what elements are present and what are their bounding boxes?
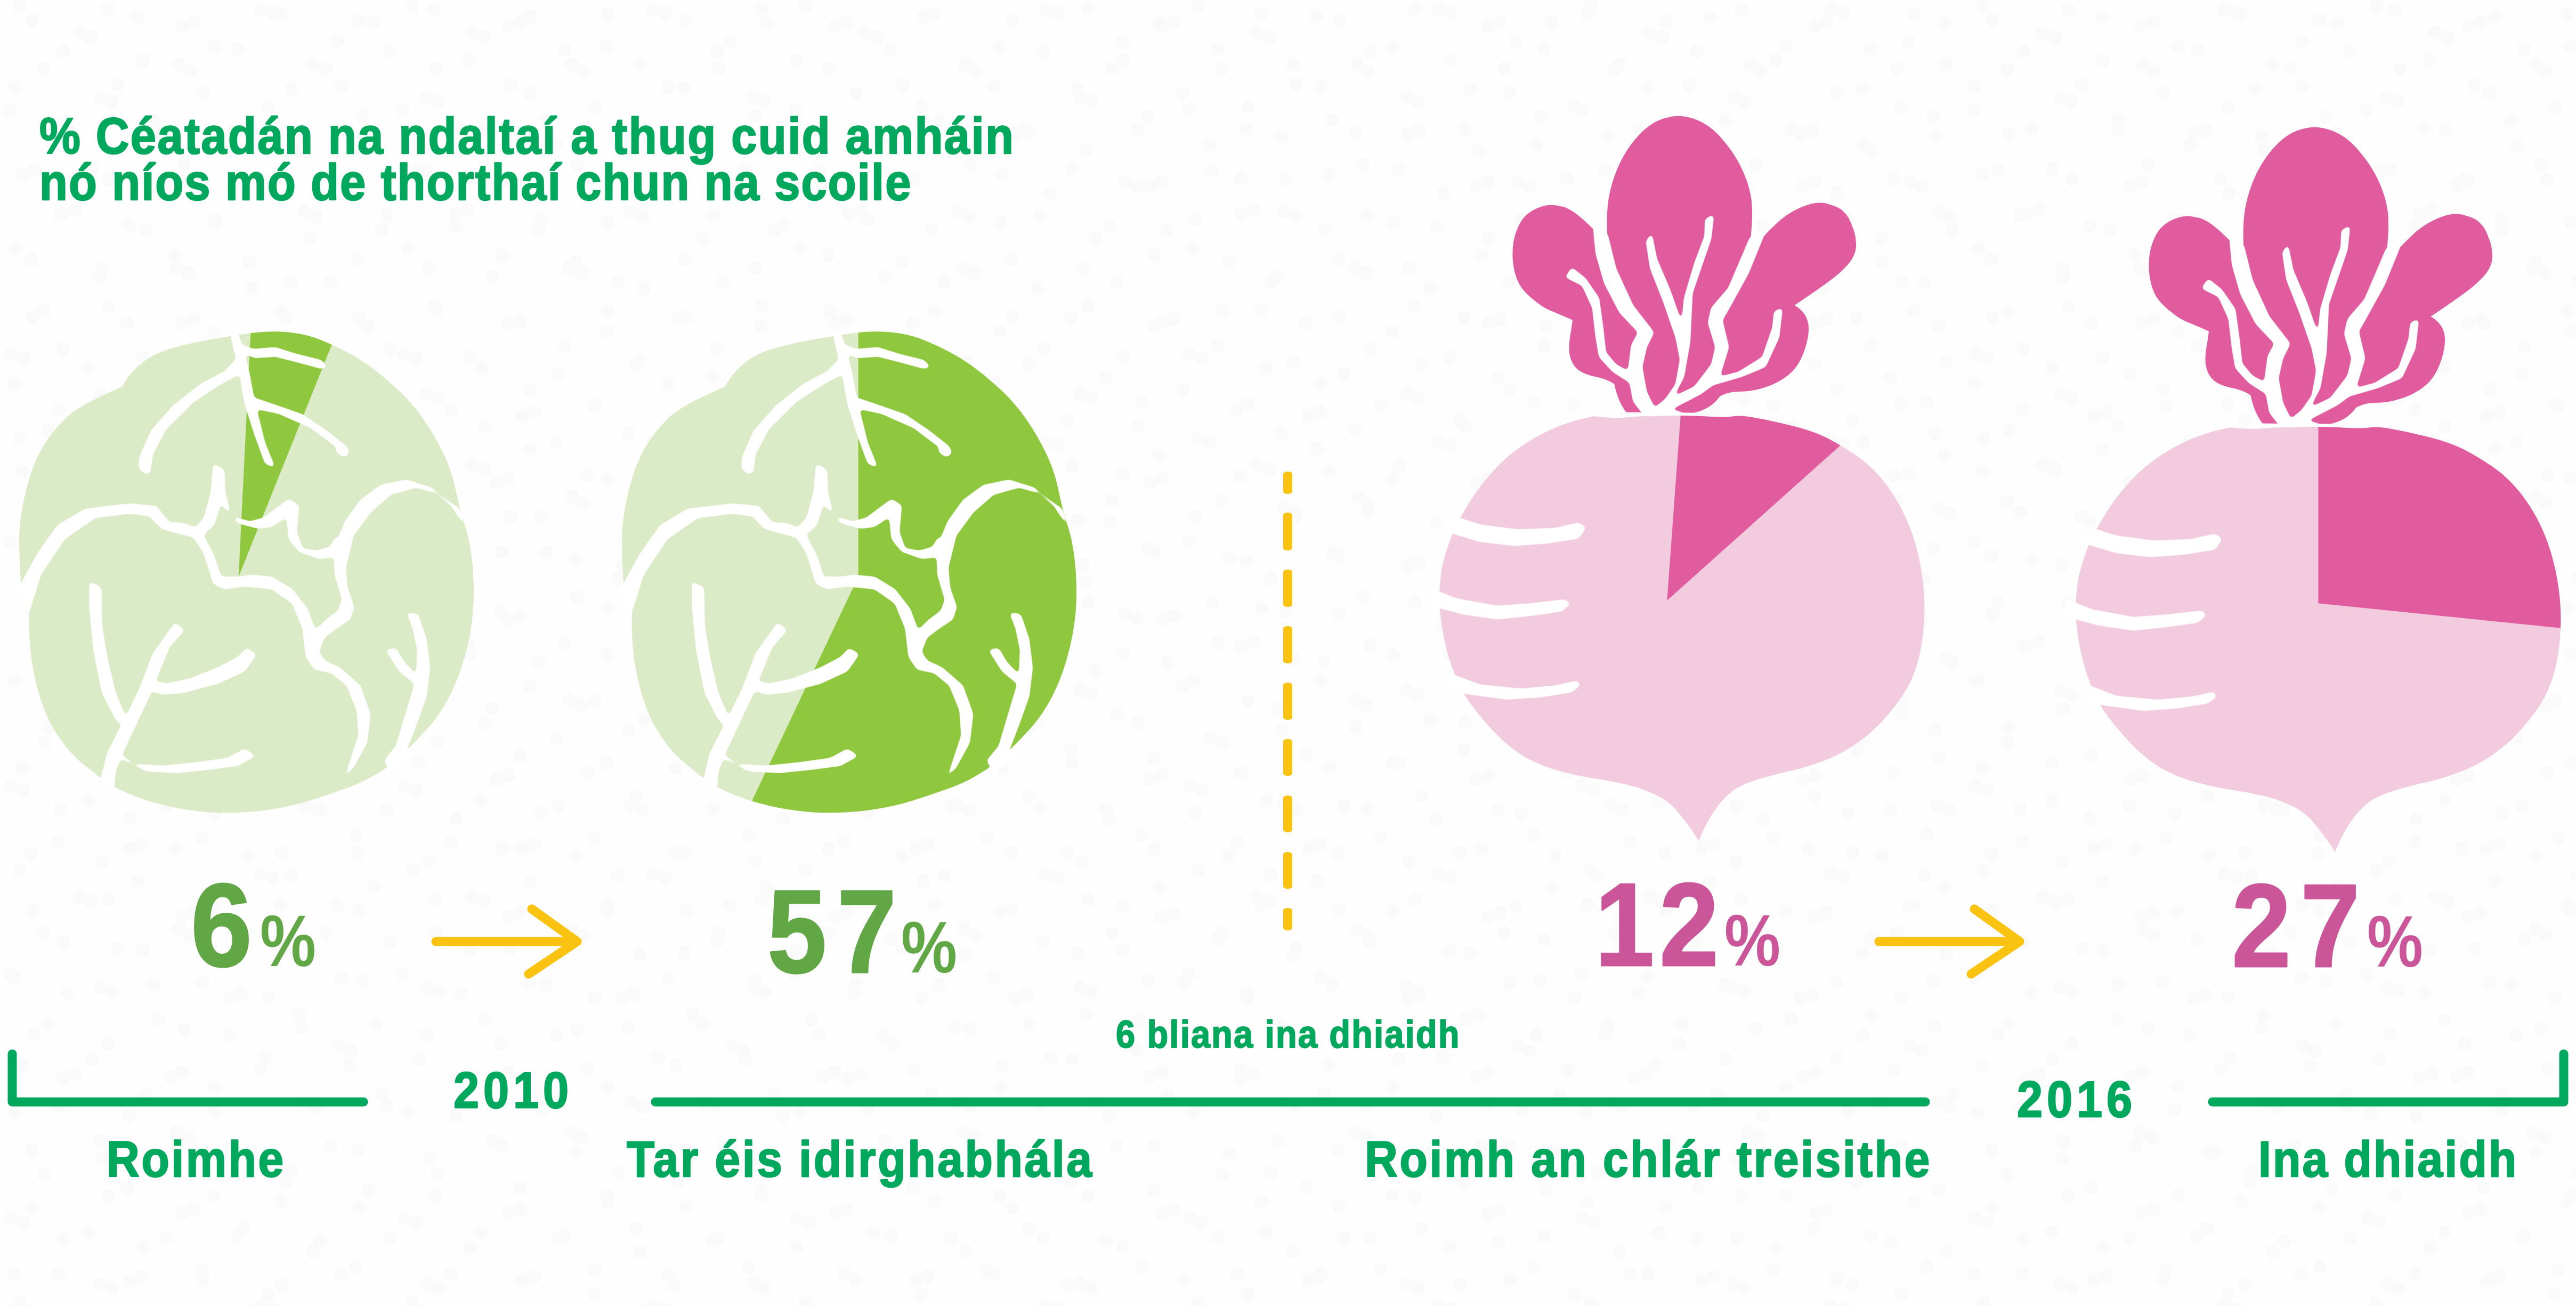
value: 6%: % [260, 901, 316, 982]
label: Ina dhiaidh: Ina dhiaidh [2258, 1131, 2516, 1188]
dashed divider [1283, 472, 1292, 930]
label: Roimhe: Roimhe [107, 1131, 283, 1188]
value: 57% [767, 865, 957, 997]
arrow 1 [436, 909, 577, 974]
value: 27%: % [2367, 901, 2423, 983]
cabbage veins [17, 333, 467, 796]
label: Roimh an chlár treisithe: Roimh an chlár treisithe [1365, 1131, 1930, 1188]
caption: 6 bliana ina dhiaidh: 6 bliana ina dhiaidh [1116, 1013, 1459, 1056]
turnip filled wedge [2318, 427, 2561, 628]
value: 12% [1595, 858, 1780, 991]
cabbage veins [620, 333, 1070, 796]
cabbage filled share [752, 331, 1076, 813]
turnip veins [2065, 225, 2419, 711]
turnip filled wedge [1667, 416, 1841, 601]
icon: turnip 12% [1429, 116, 1924, 841]
value: 12%: 12 [1595, 858, 1719, 991]
label: Tar éis idirghabhála: Tar éis idirghabhála [627, 1131, 1092, 1188]
year 2010: 2010 [453, 1062, 569, 1119]
icon: cabbage 6% [17, 314, 474, 813]
turnip veins [1429, 214, 1783, 700]
year 2016: 2016 [2017, 1071, 2132, 1128]
title [39, 108, 1014, 211]
value: 57%: % [901, 907, 957, 988]
value: 27%: 27 [2232, 859, 2360, 992]
value: 6% [191, 859, 316, 992]
value: 27% [2232, 859, 2423, 992]
title: nó níos mó de thorthaí chun na scoile [39, 154, 911, 211]
title: % Céatadán na ndaltaí a thug cuid amháin [39, 108, 1014, 165]
arrow 2 [1879, 909, 2020, 974]
timeline right bracket [2213, 1054, 2564, 1102]
value: 57%: 57 [767, 865, 896, 997]
cabbage filled wedge [239, 331, 331, 577]
value: 12%: % [1724, 900, 1780, 981]
timeline left bracket [12, 1054, 363, 1102]
icon: cabbage 57% [622, 331, 1076, 813]
value: 6%: 6 [191, 859, 252, 992]
timeline middle bar [655, 1098, 1925, 1106]
icon: turnip 27% [2065, 127, 2576, 852]
